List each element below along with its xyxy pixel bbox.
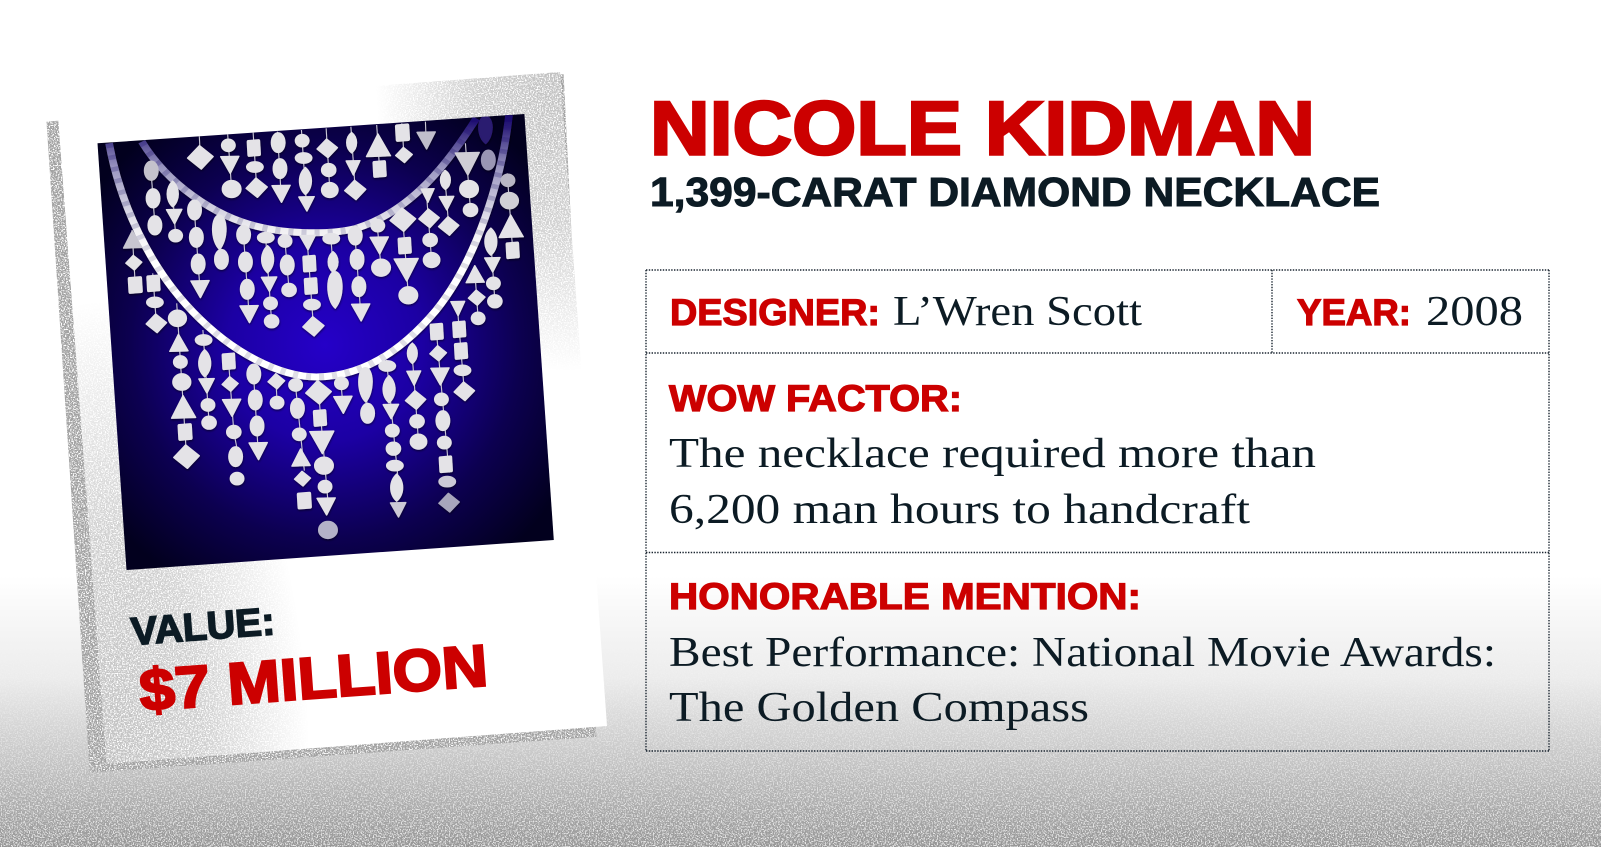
card shadow — [46, 74, 596, 773]
value amount: $7 MILLION — [137, 633, 490, 724]
year cell: 2008 — [1426, 289, 1523, 335]
table dotted borders — [646, 270, 1549, 751]
icon: diamond necklace — [109, 115, 523, 538]
honorable mention block: Best Performance: National Movie Awards: — [669, 630, 1496, 676]
year cell: YEAR: — [1297, 292, 1411, 333]
designer row: L’Wren Scott — [893, 289, 1142, 335]
wow factor block — [669, 378, 1316, 533]
panel: details table — [646, 270, 1549, 751]
wow factor block: 6,200 man hours to handcraft — [669, 487, 1250, 533]
photo background — [98, 114, 554, 570]
year cell — [1297, 289, 1523, 335]
background gradient — [0, 619, 1601, 847]
title: NICOLE KIDMAN — [650, 86, 1315, 172]
honorable mention block — [669, 576, 1496, 731]
honorable mention block: HONORABLE MENTION: — [669, 576, 1141, 617]
wow factor block: WOW FACTOR: — [669, 378, 962, 419]
upper necklace arc — [142, 118, 476, 233]
lower necklace arc — [109, 115, 509, 377]
value label: VALUE: — [129, 600, 276, 654]
upper pendants — [188, 117, 495, 216]
wow factor block: The necklace required more than — [669, 431, 1316, 477]
designer row: DESIGNER: — [670, 292, 880, 333]
upper arc stripes — [142, 118, 476, 233]
honorable mention block: The Golden Compass — [669, 685, 1089, 731]
subtitle: 1,399-CARAT DIAMOND NECKLACE — [650, 169, 1380, 215]
lower pendants — [124, 174, 523, 538]
panel: value card — [30, 60, 620, 790]
lower arc stripes — [109, 115, 509, 377]
card grain — [76, 72, 579, 764]
designer row — [670, 289, 1142, 335]
necklace strings — [132, 122, 513, 502]
middle pendants — [145, 161, 459, 336]
card face — [58, 72, 607, 764]
